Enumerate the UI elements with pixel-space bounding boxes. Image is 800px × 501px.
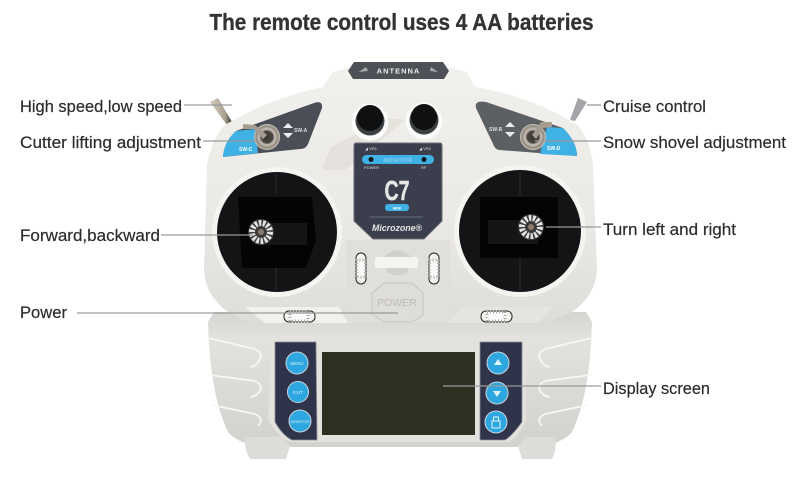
centre lever: [375, 250, 418, 276]
lower body: [208, 312, 592, 447]
monitor panel: C7: [384, 175, 410, 206]
label: turn left and right: Turn left and right: [603, 220, 736, 239]
left stick gimbal: [212, 167, 342, 297]
monitor panel: POWER: [364, 165, 379, 170]
remote control transmitter: [204, 62, 597, 459]
toggle lever left: [210, 98, 232, 125]
left switch panel: SW-A: [294, 128, 308, 134]
monitor panel: MONITOR: [383, 158, 413, 164]
right horizontal trim: [447, 307, 552, 323]
right stick gimbal: [454, 165, 586, 297]
grip ribs right: [539, 338, 592, 426]
display screen: [322, 352, 475, 435]
monitor panel: RF: [421, 165, 427, 170]
monitor panel: [354, 143, 442, 239]
centre column: [346, 240, 452, 323]
label: snow shovel: Snow shovel adjustment: [603, 133, 786, 152]
left toggle switch: [243, 124, 280, 150]
power button: [372, 283, 423, 322]
left button panel: MONITOR: [291, 419, 310, 424]
label: cutter lifting: Cutter lifting adjustment: [20, 133, 201, 152]
upper body: [204, 68, 597, 323]
label: forward backward: Forward,backward: [20, 226, 160, 245]
monitor panel: Microzone®: [372, 223, 422, 234]
toggle lever right: [570, 98, 587, 121]
right switch panel: SW-B: [489, 127, 503, 133]
right switch panel: SW-D: [547, 146, 561, 152]
antenna badge: ANTENNA: [377, 66, 420, 76]
monitor panel: ◢ VR1: [365, 146, 378, 151]
left button panel: [275, 342, 317, 440]
label: high speed: High speed,low speed: [20, 97, 182, 116]
grip ribs left: [208, 338, 261, 426]
label: cruise control: Cruise control: [603, 97, 706, 116]
left horizontal trim: [245, 307, 348, 323]
monitor panel: ◢ VR2: [419, 146, 432, 151]
power button: POWER: [377, 297, 417, 309]
left switch panel: SW-C: [239, 147, 253, 153]
centre sheen: [322, 118, 405, 170]
monitor panel: MINI: [393, 206, 401, 210]
title: The remote control uses 4 AA batteries: [210, 9, 594, 35]
label: power: Power: [20, 303, 67, 322]
right button panel: [480, 342, 522, 440]
left button panel: EXIT: [293, 390, 303, 395]
right vertical trim: [429, 253, 439, 284]
display bezel: [268, 336, 526, 442]
label: display screen: Display screen: [603, 379, 710, 398]
left button panel: MENU: [290, 361, 304, 366]
leader lines: [77, 105, 601, 386]
right toggle switch: [520, 122, 552, 150]
knob left: [352, 104, 388, 140]
knob right: [406, 102, 442, 140]
feet: [245, 437, 556, 459]
antenna badge: [348, 62, 449, 79]
left switch panel: [223, 102, 322, 157]
right switch panel: [476, 102, 577, 156]
left vertical trim: [356, 253, 366, 284]
